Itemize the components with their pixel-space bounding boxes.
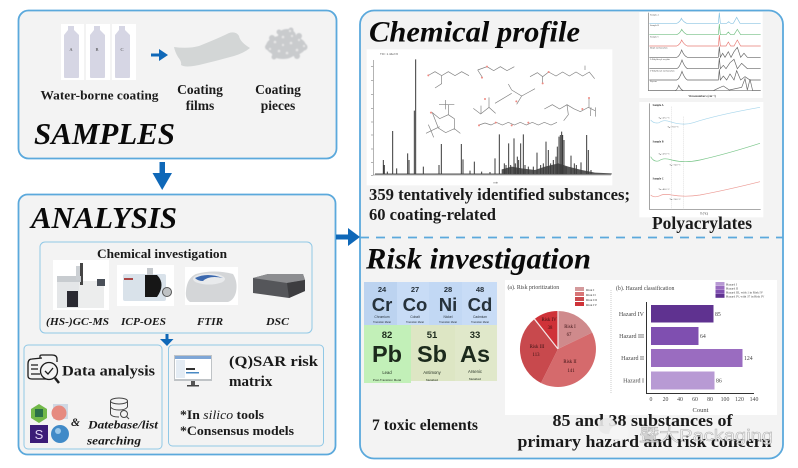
chart: hazard classification bars: 60: [692, 397, 698, 403]
icon: coating pieces: [265, 28, 308, 60]
chart: hazard classification bars: 120: [735, 397, 744, 403]
periodic table: toxic elements: 27: [411, 285, 419, 294]
chart: hazard classification bars: 124: [744, 356, 753, 362]
heading: chemical profile: Chemical profile: [369, 16, 580, 48]
chart: hazard classification bars: Hazard IV: [619, 312, 645, 318]
periodic table: toxic elements: Lead: [382, 370, 392, 375]
periodic table: toxic elements: Cobalt: [410, 315, 420, 319]
label: DSC: DSC: [265, 317, 290, 328]
chart: hazard classification bars: Hazard IV, with 37 in Risk IV: [726, 294, 765, 300]
chart: chromatogram with structures: [367, 49, 612, 185]
icon: document and magnifier: [28, 355, 59, 383]
periodic table: toxic elements: Pb: [372, 341, 402, 367]
arrow: bottles to films: [151, 49, 168, 61]
heading: QSAR risk matrix: (Q)SAR risk: [229, 354, 319, 370]
panel: QSAR risk matrix: [168, 345, 324, 446]
chart: FTIR spectra: Sample B: [650, 24, 660, 27]
chart: DSC curves: Tₘ=48.0 °C: [658, 188, 670, 191]
arrow: samples to analysis: [152, 162, 172, 190]
text: consensus models: *Consensus models: [180, 424, 294, 438]
chart: hazard classification bars: 100: [721, 397, 729, 403]
chart: risk prioritization pie: Risk II: [586, 293, 596, 297]
periodic table: toxic elements: Cadmium: [473, 315, 487, 319]
periodic table: toxic elements: 82: [382, 330, 392, 341]
panel: data analysis: [24, 345, 162, 449]
icon: GC-MS instrument: [53, 260, 109, 310]
chart: hazard classification bars: [611, 282, 765, 414]
chart: risk prioritization pie: Risk II: [563, 360, 577, 365]
chart: chromatogram with structures: min: [493, 180, 498, 184]
chart: hazard classification bars: 0: [650, 397, 653, 403]
chart: DSC curves: Sample B: [653, 141, 664, 144]
periodic table: toxic elements: Co: [403, 294, 427, 315]
chart: FTIR spectra: 2-Ethylhexyl methacrylate: [650, 69, 675, 72]
periodic table: toxic elements: [364, 282, 497, 383]
label: FTIR: FTIR: [196, 317, 223, 328]
label: coating films: Coating: [177, 82, 223, 97]
chart: risk prioritization pie: 113: [532, 353, 540, 358]
label: database list searching: Datebase/list: [87, 420, 159, 432]
chart: DSC curves: Tₘ=47.0 °C: [658, 152, 670, 155]
icon: computer monitor: [174, 355, 212, 386]
chart: DSC curves: Tₘ=74.0 °C: [669, 198, 681, 201]
chart: FTIR spectra: Wavenumbers (cm⁻¹): [688, 94, 716, 98]
chart: hazard classification bars: 80: [707, 397, 713, 403]
chart: risk prioritization pie: Risk IV: [586, 303, 597, 307]
chart: FTIR spectra: Butyl methacrylate: [650, 47, 668, 50]
watermark: [598, 418, 773, 445]
arrow: investigation to analysis tools: [160, 334, 174, 346]
icon: coating bottles: [61, 24, 136, 80]
chart: DSC curves: Tₘ=73.0 °C: [667, 125, 679, 128]
periodic table: toxic elements: 24: [378, 285, 387, 294]
periodic table: toxic elements: Transition Metal: [406, 321, 424, 324]
chart: hazard classification bars: Count: [693, 407, 709, 414]
periodic table: toxic elements: Transition Metal: [373, 321, 391, 324]
heading: samples: SAMPLES: [34, 116, 175, 151]
periodic table: toxic elements: 28: [444, 285, 452, 294]
label: ampersand: &: [71, 417, 80, 429]
icon: DSC instrument: [253, 274, 305, 298]
divider: dashed: [360, 236, 783, 238]
chart: FTIR spectra: Sample C: [650, 35, 660, 38]
icon: coating bottles: A: [69, 47, 73, 52]
label: searching: searching: [86, 436, 141, 448]
periodic table: toxic elements: Post-Transition Metal: [373, 378, 401, 382]
periodic table: toxic elements: Transition Metal: [471, 321, 489, 324]
chart: hazard classification bars: Hazard I: [623, 378, 644, 384]
chart: hazard classification bars: 85: [715, 312, 721, 318]
chart: risk prioritization pie: Risk IV: [541, 318, 557, 323]
icon: FTIR instrument: [185, 267, 238, 305]
heading: chemical investigation: Chemical investigation: [97, 247, 227, 261]
icons: software logos: S: [35, 427, 44, 442]
periodic table: toxic elements: Sb: [417, 341, 447, 367]
chart: hazard classification bars: 40: [677, 397, 683, 403]
periodic table: toxic elements: 48: [476, 285, 484, 294]
periodic table: toxic elements: Cr: [372, 294, 392, 315]
periodic table: toxic elements: 33: [470, 330, 480, 341]
panel: analysis: [18, 194, 336, 454]
periodic table: toxic elements: 51: [427, 330, 438, 341]
periodic table: toxic elements: Metalloid: [426, 378, 438, 382]
chart: FTIR spectra: Styrene: [650, 80, 657, 83]
chart: DSC curves: Tₘ=74.0 °C: [669, 164, 681, 167]
heading: analysis: ANALYSIS: [29, 200, 177, 235]
chart: hazard classification bars: Hazard II: [621, 356, 644, 362]
chart: FTIR spectra: 2-Ethylhexyl acrylate: [650, 58, 670, 61]
chart: hazard classification bars: 140: [750, 397, 758, 403]
label: GC-MS: (HS-)GC-MS: [46, 317, 109, 328]
chart: hazard classification bars: Hazard II: [726, 286, 738, 290]
label: coating pieces: pieces: [261, 98, 295, 113]
chart: hazard classification bars: Hazard I: [726, 282, 737, 286]
periodic table: toxic elements: Chromium: [374, 315, 390, 319]
periodic table: toxic elements: Metalloid: [469, 377, 481, 381]
label: polyacrylates: Polyacrylates: [652, 213, 752, 233]
panel: chemical investigation: [40, 242, 312, 333]
chart: hazard classification bars: (b). Hazard classification: [616, 285, 675, 292]
heading: risk investigation: Risk investigation: [365, 242, 591, 276]
chart: DSC curves: Sample C: [653, 177, 664, 180]
panel: samples: [18, 10, 336, 158]
chart: DSC curves: [639, 102, 763, 217]
chart: hazard classification bars: 20: [663, 397, 668, 403]
periodic table: toxic elements: Ni: [439, 294, 457, 315]
chart: DSC curves: Sample A: [653, 104, 664, 107]
chart: hazard classification bars: Hazard III, with 1 in Risk IV: [726, 290, 764, 296]
chart: DSC curves: T (°C): [700, 211, 708, 215]
periodic table: toxic elements: Nickel: [444, 315, 453, 319]
panel: results: [360, 10, 783, 458]
label: water-borne coating: Water-borne coating: [40, 88, 159, 102]
chart: risk prioritization pie: 141: [567, 369, 575, 374]
chart: FTIR spectra: Sample A: [650, 13, 659, 16]
chart: chromatogram with structures: TIC: 1.44e7/2: [380, 52, 398, 56]
periodic table: toxic elements: Arsenic: [468, 369, 482, 374]
chart panel: risk and hazard: [505, 280, 777, 415]
icon: ICP-OES instrument: [117, 265, 174, 306]
label: ICP-OES: ICP-OES: [120, 317, 166, 328]
heading: data analysis: Data analysis: [62, 364, 155, 380]
text: coating-related: 60 coating-related: [369, 205, 496, 224]
chart: hazard classification bars: 86: [716, 378, 722, 384]
icon: coating film: [174, 32, 250, 66]
chart: risk prioritization pie: 67: [567, 333, 572, 338]
chart: hazard classification bars: Hazard III: [619, 334, 644, 340]
watermark: 暨大Packaging: [639, 426, 773, 445]
label: coating pieces: Coating: [255, 82, 301, 97]
text: in silico tools: *In silico tools: [180, 408, 264, 422]
periodic table: toxic elements: Transition Metal: [439, 321, 457, 324]
chart: risk prioritization pie: 38: [548, 326, 553, 331]
icon: coating bottles: C: [120, 47, 124, 52]
icon: coating bottles: B: [95, 47, 99, 52]
heading: matrix: matrix: [229, 374, 273, 390]
periodic table: toxic elements: As: [460, 341, 490, 367]
chart: risk prioritization pie: Risk III: [586, 298, 598, 302]
text: primary hazard and risk concern: primary hazard and risk concern: [518, 432, 772, 451]
chart: risk prioritization pie: Risk I: [564, 325, 576, 330]
chart: risk prioritization pie: Risk III: [530, 345, 545, 350]
periodic table: toxic elements: Antimony: [423, 370, 442, 375]
chart: risk prioritization pie: Risk I: [586, 288, 595, 292]
periodic table: toxic elements: Cd: [468, 294, 492, 315]
chart: FTIR spectra: [639, 12, 763, 98]
text: identified substances: 359 tentatively identified substances;: [369, 185, 630, 204]
chart: hazard classification bars: 64: [700, 334, 706, 340]
text: hazard and risk concern: 85 and 38 substances of: [552, 411, 733, 430]
label: toxic elements: 7 toxic elements: [372, 417, 478, 434]
icon: database search: [110, 398, 129, 419]
chart: DSC curves: Tₘ=47.5 °C: [658, 116, 670, 119]
label: coating films: films: [186, 98, 214, 113]
arrow: analysis to results: [336, 228, 360, 246]
chart: risk prioritization pie: [508, 284, 598, 387]
chart: risk prioritization pie: (a). Risk prioritization: [508, 284, 559, 291]
